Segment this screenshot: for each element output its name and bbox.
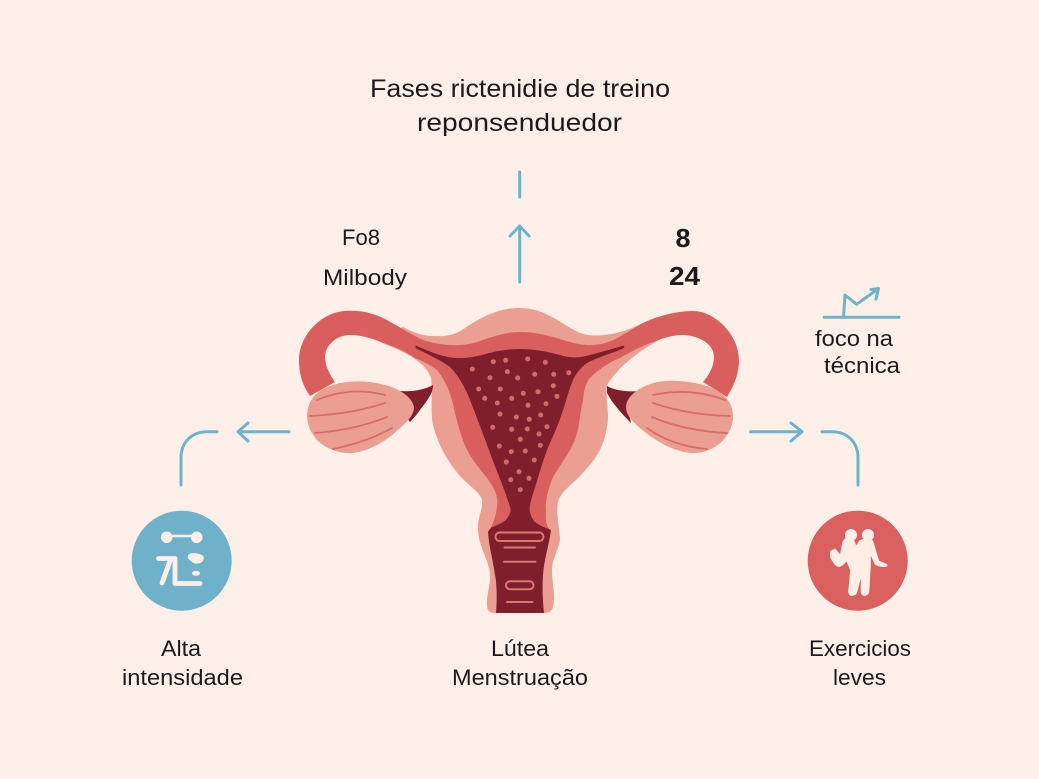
icon: trend chart (824, 288, 899, 317)
title: reponsenduedor (417, 109, 622, 137)
right ovary (626, 381, 733, 453)
cervix details (496, 532, 544, 602)
right ligament (607, 386, 640, 423)
label: alta intensidade (122, 636, 243, 690)
cavity (416, 346, 624, 613)
right numbers: 8 (676, 223, 690, 253)
outer layer (380, 308, 663, 613)
label: foco na técnica: técnica (824, 353, 901, 378)
left ovary (307, 381, 414, 453)
icon: high intensity (132, 511, 232, 611)
uterus illustration (299, 308, 739, 613)
title (370, 75, 670, 137)
title: Fases rictenidie de treino (370, 75, 670, 103)
label: foco na técnica: foco na (815, 326, 894, 351)
label: lútea menstruação: Lútea (491, 636, 550, 661)
label: alta intensidade: intensidade (122, 665, 243, 690)
dots (470, 356, 571, 492)
label: exercicios leves: Exercicios (809, 636, 911, 661)
middle layer (299, 311, 739, 530)
label: exercicios leves: leves (833, 665, 886, 690)
icon: light exercise (808, 511, 908, 611)
left labels: Fo8 (342, 225, 380, 250)
right numbers: 24 (669, 261, 701, 291)
label: foco na técnica (815, 326, 901, 378)
left labels: Milbody (323, 265, 407, 290)
label: exercicios leves (809, 636, 911, 690)
arrow: right (750, 423, 858, 485)
right numbers (669, 223, 701, 291)
left labels (323, 225, 407, 290)
arrow: up (510, 172, 529, 282)
label: lútea menstruação: Menstruação (452, 665, 588, 690)
arrow: left (181, 423, 289, 485)
left ligament (400, 385, 433, 422)
label: lútea menstruação (452, 636, 588, 690)
label: alta intensidade: Alta (161, 636, 202, 661)
